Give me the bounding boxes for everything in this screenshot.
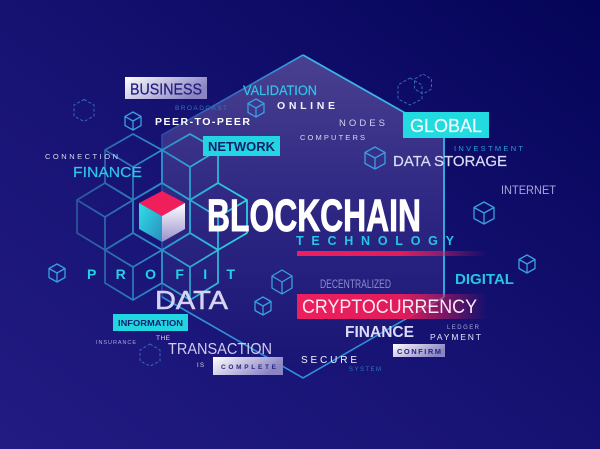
label: BROADCAST: BROADCAST — [175, 105, 227, 112]
label: TRANSACTION: TRANSACTION — [168, 341, 272, 358]
label: INFORMATION — [113, 314, 188, 331]
icon: central red cube — [139, 191, 185, 242]
label: DECENTRALIZED: DECENTRALIZED — [320, 279, 391, 291]
subtitle: TECHNOLOGY: TECHNOLOGY — [296, 234, 455, 248]
red underline bar — [297, 251, 487, 256]
label: GLOBAL: GLOBAL — [410, 116, 482, 136]
label: INTERNET: INTERNET — [501, 183, 557, 197]
label: FINANCE cyan: FINANCE — [73, 164, 142, 181]
label: GLOBAL — [403, 112, 489, 138]
label: COMPLETE: COMPLETE — [221, 364, 277, 371]
label: THE: THE — [156, 335, 171, 342]
label: ONLINE: ONLINE — [277, 100, 335, 112]
label: COMPUTERS: COMPUTERS — [300, 133, 365, 142]
label: SECURE: SECURE — [301, 355, 357, 366]
title: BLOCKCHAIN: BLOCKCHAIN — [207, 190, 421, 241]
label: INFORMATION: INFORMATION — [118, 318, 183, 328]
label: VALIDATION: VALIDATION — [243, 83, 317, 98]
label: NETWORK — [203, 136, 280, 156]
label: PAYMENT: PAYMENT — [430, 332, 481, 342]
label: COMPLETE — [213, 357, 283, 375]
label: BUSINESS — [125, 77, 207, 99]
label: DIGITAL: DIGITAL — [455, 271, 514, 288]
label: IS: IS — [197, 363, 204, 369]
label: CONFIRM: CONFIRM — [397, 347, 441, 356]
label: INSURANCE: INSURANCE — [96, 340, 136, 346]
isometric hexagon cube grid — [77, 134, 247, 300]
label: LEDGER: LEDGER — [447, 325, 480, 331]
large hexagon frame — [162, 55, 444, 378]
label: PEER-TO-PEER: PEER-TO-PEER — [155, 116, 250, 128]
icons: small outlined cubes — [49, 99, 535, 315]
label: CONNECTION: CONNECTION — [45, 152, 118, 161]
label: CRYPTOCURRENCY: CRYPTOCURRENCY — [302, 297, 477, 318]
label: NODES: NODES — [339, 118, 385, 129]
label: INVESTMENT: INVESTMENT — [454, 144, 523, 153]
label: NETWORK: NETWORK — [208, 139, 276, 154]
icons: dashed hexagons — [74, 74, 432, 366]
label: DATA: DATA — [155, 285, 229, 315]
label: SYSTEM: SYSTEM — [349, 367, 381, 373]
label: FINANCE white: FINANCE — [345, 324, 414, 341]
label: BUSINESS: BUSINESS — [130, 82, 202, 98]
label: PROFIT: PROFIT — [87, 266, 235, 282]
label: DATA STORAGE: DATA STORAGE — [393, 153, 507, 170]
label: CONFIRM — [393, 344, 445, 357]
